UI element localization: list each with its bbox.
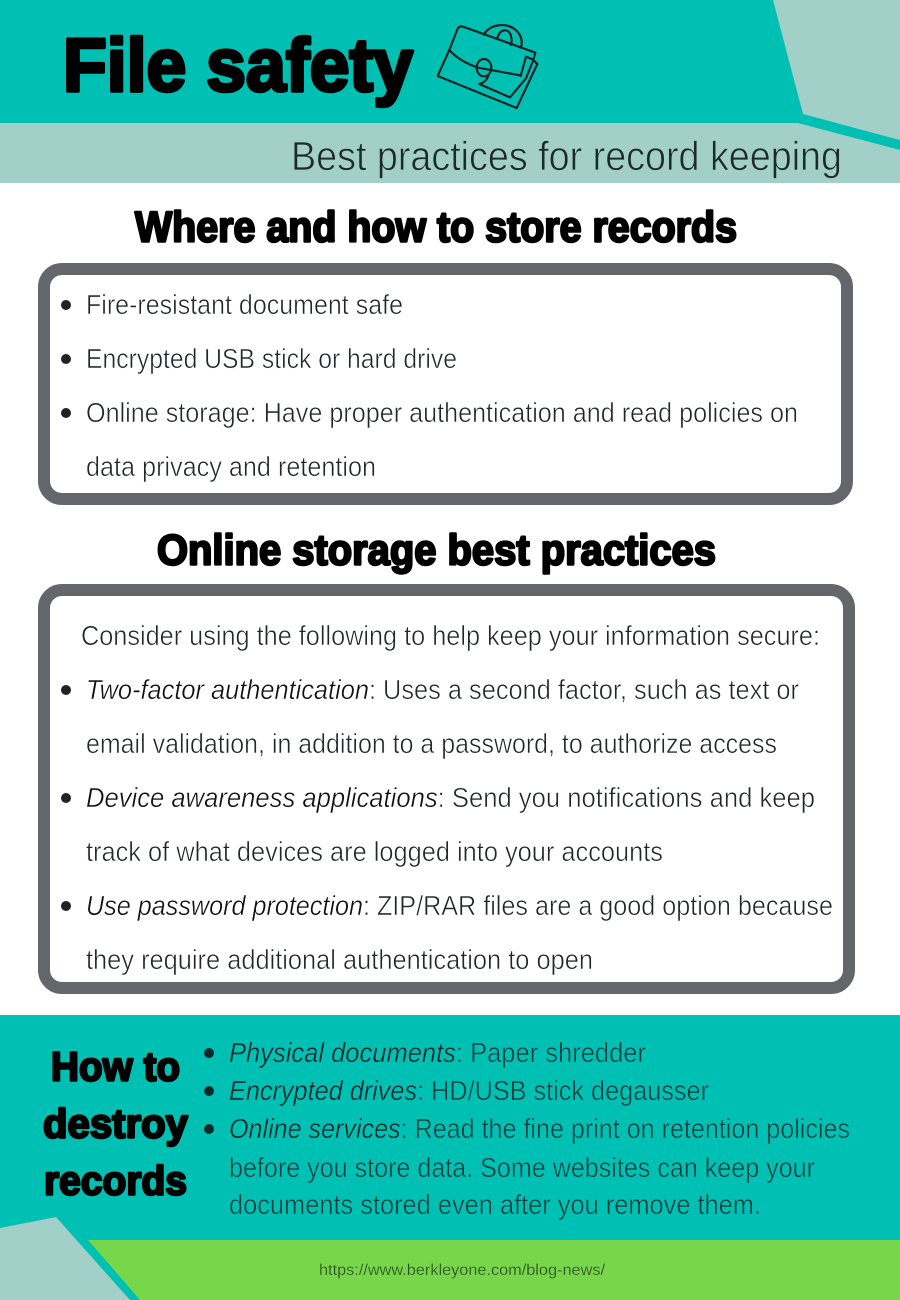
list item: online services: before you store data. Some websites can keep your	[229, 1152, 815, 1183]
list item: password protection	[61, 890, 833, 975]
heading: online storage best practices: Online storage best practices	[157, 526, 716, 574]
list item: encrypted drive: Encrypted USB stick or hard drive	[86, 343, 457, 374]
list item: online storage: Online storage: Have proper authentication and read policies on	[86, 397, 798, 428]
heading: where and how to store records: Where and how to store records	[135, 204, 737, 252]
list item: device awareness	[61, 782, 815, 867]
heading: how to destroy records	[43, 1044, 188, 1204]
icon: briefcase	[438, 25, 537, 108]
panel: online storage practices	[44, 590, 849, 988]
panel: storage locations	[44, 269, 847, 499]
list item: online services: documents stored even after you remove them.	[229, 1189, 761, 1220]
list item: password protection: they require additional authentication to open	[86, 944, 593, 975]
source url: https://www.berkleyone.com/blog-news/	[319, 1262, 606, 1279]
list item: online services	[204, 1113, 850, 1220]
list item: online storage: data privacy and retention	[86, 451, 376, 482]
list item: physical documents: Physical documents: Paper shredder	[229, 1037, 646, 1068]
footer shapes	[0, 1217, 900, 1300]
list item: two-factor authentication	[61, 674, 799, 759]
list item: online services: Online services: Read the fine print on retention policies	[229, 1113, 850, 1144]
list item: encrypted drives: Encrypted drives: HD/USB stick degausser	[229, 1075, 709, 1106]
list item: document safe: Fire-resistant document safe	[86, 289, 403, 320]
list item: two-factor authentication: Two-factor authentication: Uses a second factor, such as text or	[86, 674, 799, 705]
heading: how to destroy records: How to	[51, 1044, 180, 1090]
heading: how to destroy records: records	[44, 1158, 187, 1204]
subtitle: Best practices for record keeping	[291, 133, 842, 179]
title: File safety	[63, 23, 413, 107]
header band	[0, 0, 900, 183]
list item: online storage	[61, 397, 798, 482]
intro text: Consider using the following to help keep your information secure:	[81, 620, 820, 651]
list item: device awareness: track of what devices are logged into your accounts	[86, 836, 663, 867]
heading: how to destroy records: destroy	[43, 1100, 188, 1146]
list item: password protection: Use password protection: ZIP/RAR files are a good option because	[86, 890, 833, 921]
list item: device awareness: Device awareness applications: Send you notifications and keep	[86, 782, 815, 813]
list item: two-factor authentication: email validation, in addition to a password, to authorize access	[86, 728, 777, 759]
panel: how to destroy records	[0, 1015, 900, 1300]
